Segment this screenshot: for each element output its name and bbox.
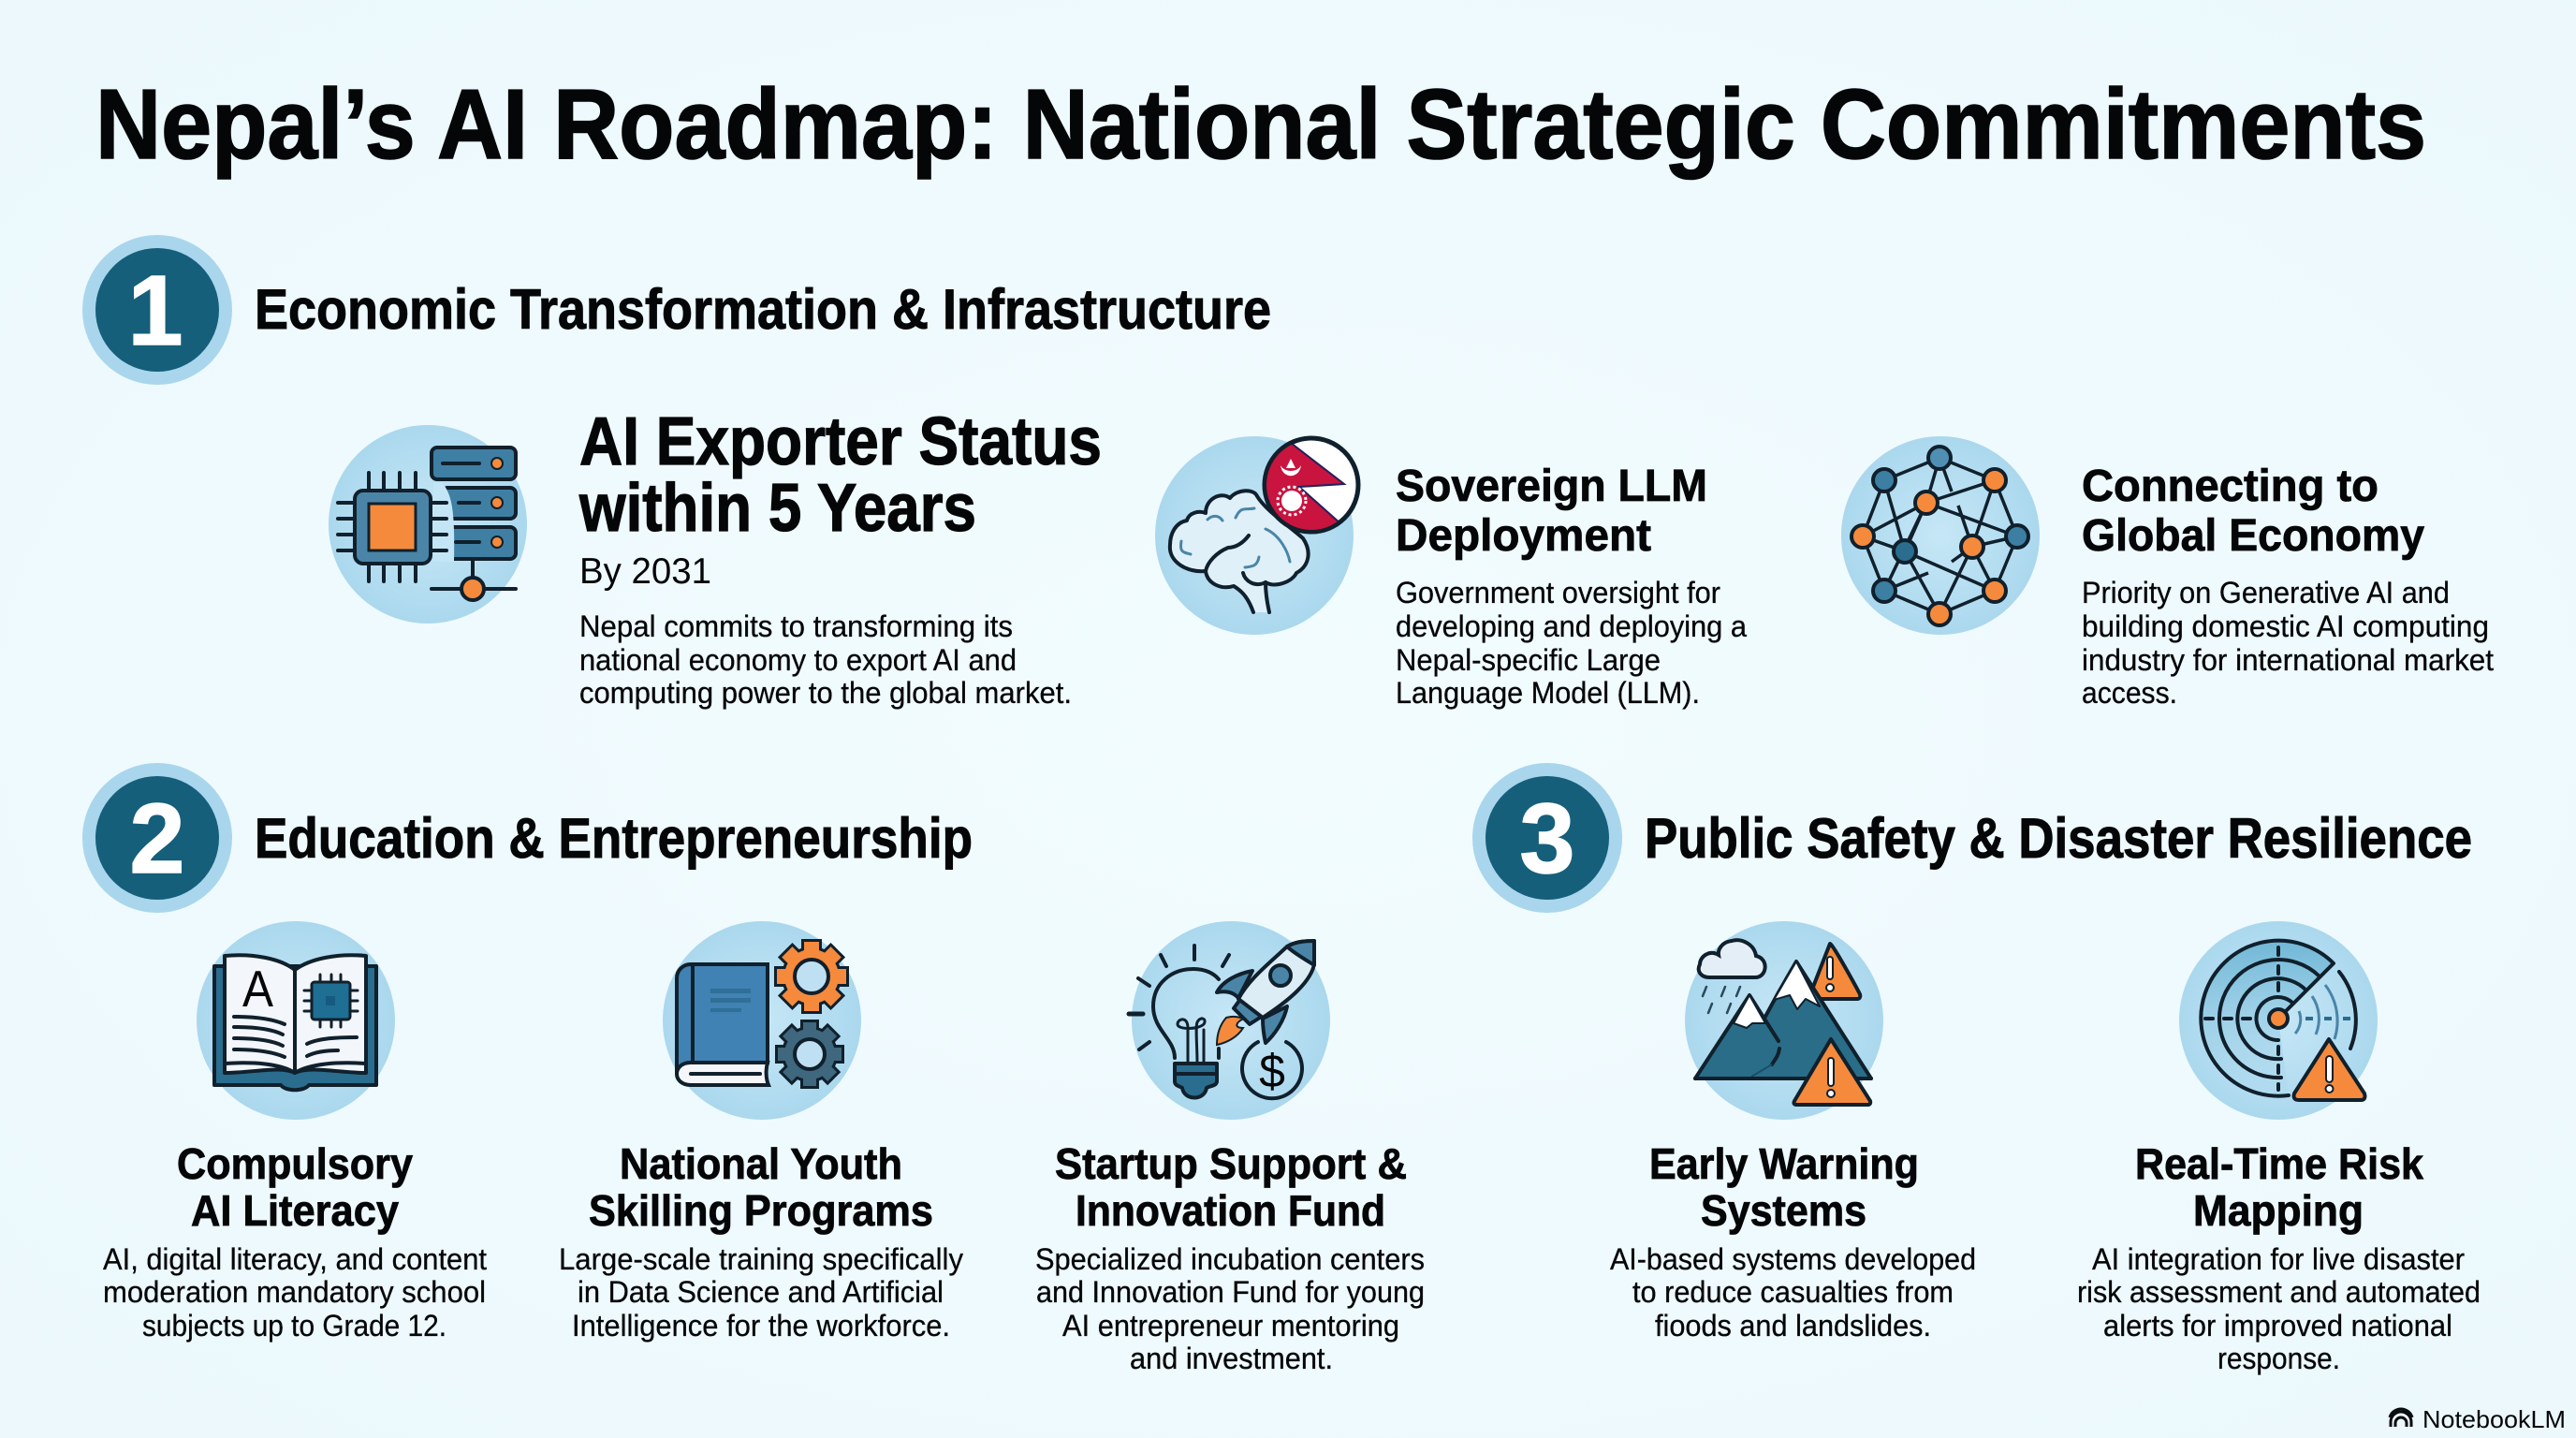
block: real-time risk mapping: AI integration for live disaster <box>2092 1242 2465 1276</box>
block: connecting to global economy: Priority on Generative AI and <box>2082 576 2450 609</box>
block: real-time risk mapping: Mapping <box>2193 1186 2364 1235</box>
panel: section 2 education and entrepreneurship <box>82 763 1425 1375</box>
icon: bulb, rocket and coin: $ <box>1259 1045 1285 1097</box>
block: real-time risk mapping: Real-Time Risk <box>2135 1139 2423 1188</box>
section heading 3: Public Safety & Disaster Resilience <box>1645 807 2472 870</box>
block: compulsory AI literacy: Compulsory <box>177 1139 413 1188</box>
icon: bulb, rocket and coin <box>1129 921 1330 1120</box>
block: national youth skilling: in Data Science and Artificial <box>578 1275 944 1309</box>
icon: brain with Nepal flag <box>1155 436 1358 635</box>
block: national youth skilling: Large-scale training specifically <box>559 1242 964 1276</box>
icon: global network <box>1841 436 2040 635</box>
block: AI exporter status: By 2031 <box>579 551 711 592</box>
block: national youth skilling: Skilling Programs <box>589 1186 933 1235</box>
icon: chip and servers <box>329 425 527 624</box>
block: national youth skilling <box>559 1139 964 1343</box>
block: startup support: Specialized incubation centers <box>1035 1242 1425 1276</box>
icon: radar with warning <box>2179 921 2378 1120</box>
block: connecting to global economy <box>2082 462 2494 710</box>
block: connecting to global economy: Connecting to <box>2082 462 2378 511</box>
badge 1: 1 <box>128 256 183 366</box>
badge 3 <box>1472 763 1622 913</box>
block: early warning systems: to reduce casualties from <box>1632 1275 1954 1309</box>
badge 1 <box>82 235 232 385</box>
block: early warning systems: Early Warning <box>1649 1139 1919 1188</box>
block: sovereign LLM: Language Model (LLM). <box>1396 676 1700 710</box>
block: real-time risk mapping <box>2077 1139 2481 1375</box>
icon: book and gears <box>663 921 861 1120</box>
block: compulsory AI literacy: moderation mandatory school <box>103 1275 486 1309</box>
block: AI exporter status: within 5 Years <box>578 471 976 546</box>
block: AI exporter status: Nepal commits to transforming its <box>579 609 1013 643</box>
block: connecting to global economy: building domestic AI computing <box>2082 609 2489 643</box>
block: connecting to global economy: Global Economy <box>2082 511 2424 561</box>
NotebookLM logo: NotebookLM <box>2422 1405 2566 1433</box>
badge 2 <box>82 763 232 913</box>
icon: open book with chip: A <box>242 960 273 1018</box>
block: real-time risk mapping: risk assessment and automated <box>2077 1275 2481 1309</box>
block: early warning systems <box>1610 1139 1976 1343</box>
block: national youth skilling: National Youth <box>620 1139 902 1188</box>
badge 2: 2 <box>130 784 184 894</box>
block: compulsory AI literacy <box>103 1139 487 1343</box>
block: startup support: AI entrepreneur mentoring <box>1062 1309 1399 1343</box>
block: national youth skilling: Intelligence for the workforce. <box>572 1309 950 1343</box>
block: startup support: and Innovation Fund for young <box>1036 1275 1425 1309</box>
block: connecting to global economy: industry for international market <box>2082 643 2494 677</box>
block: startup support: Startup Support & <box>1055 1139 1407 1188</box>
block: sovereign LLM: Nepal-specific Large <box>1396 643 1661 677</box>
badge 3: 3 <box>1520 784 1574 894</box>
section heading 2: Education & Entrepreneurship <box>255 807 973 870</box>
block: AI exporter status: AI Exporter Status <box>579 404 1102 479</box>
block: sovereign LLM <box>1396 462 1748 710</box>
block: startup support: and investment. <box>1130 1342 1333 1375</box>
block: AI exporter status: computing power to the global market. <box>579 676 1072 710</box>
title: Nepal’s AI Roadmap: National Strategic Commitments <box>95 69 2426 180</box>
block: sovereign LLM: developing and deploying a <box>1396 609 1748 643</box>
panel: section 1 economic transformation <box>82 235 2494 710</box>
block: compulsory AI literacy: AI Literacy <box>191 1186 399 1235</box>
block: sovereign LLM: Deployment <box>1396 511 1651 561</box>
icon: open book with chip <box>197 921 395 1120</box>
block: early warning systems: AI-based systems developed <box>1610 1242 1976 1276</box>
panel: section 3 public safety and disaster resilience <box>1472 763 2481 1375</box>
block: sovereign LLM: Government oversight for <box>1396 576 1720 609</box>
icon: mountains, cloud and warnings <box>1685 921 1883 1120</box>
block: startup support <box>1035 1139 1425 1375</box>
block: early warning systems: Systems <box>1701 1186 1866 1235</box>
section heading 1: Economic Transformation & Infrastructure <box>255 278 1271 341</box>
block: compulsory AI literacy: subjects up to Grade 12. <box>142 1309 446 1343</box>
block: AI exporter status: national economy to export AI and <box>579 643 1017 677</box>
block: compulsory AI literacy: AI, digital literacy, and content <box>103 1242 487 1276</box>
block: early warning systems: fioods and landslides. <box>1655 1309 1931 1343</box>
block: startup support: Innovation Fund <box>1076 1186 1385 1235</box>
block: sovereign LLM: Sovereign LLM <box>1396 462 1707 511</box>
block: AI exporter status <box>578 404 1102 710</box>
block: real-time risk mapping: response. <box>2217 1342 2340 1375</box>
block: connecting to global economy: access. <box>2082 676 2177 710</box>
block: real-time risk mapping: alerts for improved national <box>2103 1309 2452 1343</box>
